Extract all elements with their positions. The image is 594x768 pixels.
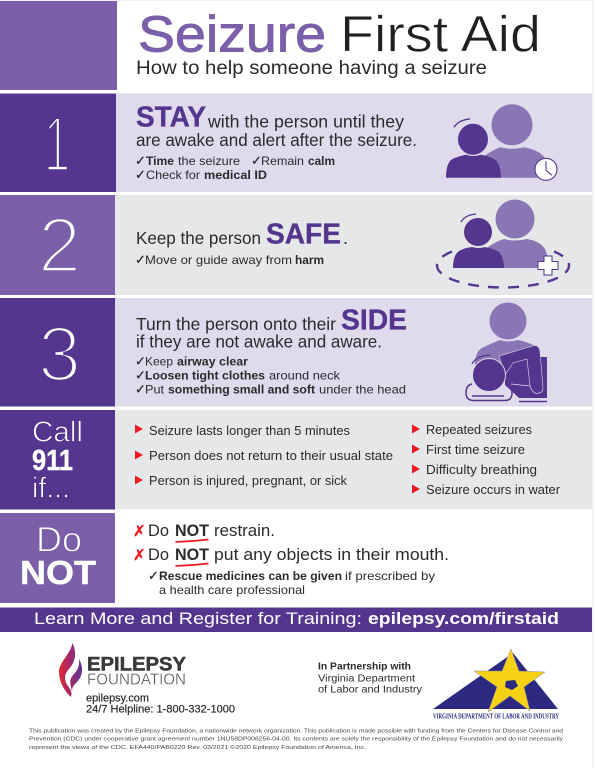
step 3 checklist: Keep — [145, 355, 173, 369]
panel: step 3 side — [0, 298, 592, 406]
step 1 checklist: ✓ — [135, 168, 146, 183]
step 1 heading: are awake and alert after the seizure. — [136, 130, 417, 150]
panel: call 911 — [0, 410, 592, 510]
step 1 checklist: calm — [308, 154, 335, 168]
step 3 heading: if they are not awake and aware. — [136, 332, 382, 352]
step number 3: 3 — [38, 310, 81, 398]
911 reasons left column: Person is injured, pregnant, or sick — [149, 474, 348, 488]
logo: epilepsy foundation: epilepsy.com — [86, 693, 149, 705]
panel: do not — [0, 513, 449, 603]
logo: virginia department of labor and industry — [433, 649, 559, 720]
step 1 checklist: the seizure — [178, 154, 240, 168]
rescue medicines note: if prescribed by — [345, 569, 435, 583]
fine print: Prevention (CDC) under cooperative grant agreement number 1NU58DP006256-04-00. Its contents are solely the responsibility of the Epilepsy Foundation and do not necessarily — [29, 737, 563, 743]
911 reasons right column: Difficulty breathing — [426, 463, 537, 477]
step 2 checklist — [135, 253, 324, 268]
panel: step 1 stay — [0, 94, 592, 192]
step 1 heading: STAY — [136, 102, 206, 134]
step 2 checklist: ✓ — [135, 253, 146, 268]
step 1 checklist — [135, 154, 335, 183]
step 2 heading: Keep the person — [136, 228, 261, 248]
partnership text: of Labor and Industry — [318, 684, 423, 696]
icon: two people in safe circle — [437, 200, 569, 287]
panel: training banner: Learn More and Register for Training: — [34, 609, 362, 628]
do not restrain: Do — [148, 521, 169, 540]
911 reasons left column: Person does not return to their usual state — [149, 449, 393, 463]
911 reasons right column: Seizure occurs in water — [426, 483, 560, 497]
step 1 checklist: ✓ — [135, 154, 146, 169]
step 3 checklist: ✓ — [135, 369, 146, 384]
fine print — [29, 728, 563, 751]
step 3 checklist: under the head — [319, 383, 406, 397]
partnership text: Virginia Department — [318, 673, 415, 685]
step number 2: 2 — [38, 201, 81, 289]
do not restrain: ✗ — [133, 522, 146, 540]
do not label — [20, 521, 96, 591]
step 3 checklist: airway clear — [177, 355, 248, 369]
do not restrain: NOT — [175, 521, 210, 540]
title: Seizure — [138, 6, 326, 63]
red bullet markers — [135, 424, 420, 494]
icon: flame — [59, 643, 82, 697]
911 reasons right column — [426, 423, 560, 497]
step 3 checklist: around neck — [269, 369, 341, 383]
step 3 checklist: ✓ — [135, 355, 146, 370]
step 3 checklist — [135, 355, 406, 398]
step 1 checklist: Time — [146, 154, 174, 168]
do not restrain: restrain. — [214, 521, 275, 540]
do not restrain — [133, 521, 275, 542]
step 3 heading — [136, 304, 407, 352]
call 911 label: 911 — [32, 445, 73, 477]
step 3 checklist: Loosen tight clothes — [145, 369, 265, 383]
step 1 heading: with the person until they — [207, 111, 404, 131]
rescue medicines note: Rescue medicines can be given — [159, 569, 342, 583]
rescue medicines note: a health care professional — [159, 583, 305, 597]
step 1 checklist: Check for — [146, 168, 200, 182]
step 3 heading: SIDE — [341, 304, 407, 336]
logo: epilepsy foundation: 24/7 Helpline: 1-800-332-1000 — [86, 704, 235, 716]
fine print: This publication was created by the Epilepsy Foundation, a nationwide network organization. This publication is made possible with funding from the Centers for Disease Control and — [29, 728, 563, 734]
step 2 heading: . — [343, 228, 348, 248]
do not label: Do — [36, 521, 82, 560]
911 reasons right column: Repeated seizures — [426, 423, 532, 437]
step 2 heading — [136, 218, 348, 250]
step 2 checklist: Move or guide away from — [145, 253, 292, 267]
logo: epilepsy foundation: EPILEPSY — [87, 655, 186, 676]
fine print: represent the views of the CDC. EFA440/PAB0220 Rev. 03/2021 ©2020 Epilepsy Foundation of America, Inc. — [29, 744, 366, 751]
step 3 heading: Turn the person onto their — [136, 314, 336, 334]
icon: person turned on side — [466, 302, 547, 402]
step 1 heading — [136, 102, 417, 150]
rescue medicines note: ✓ — [148, 569, 159, 584]
step 3 checklist: ✓ — [135, 383, 146, 398]
step 3 checklist: Put — [145, 383, 165, 397]
step 2 heading: SAFE — [266, 218, 341, 250]
panel: training banner: epilepsy.com/firstaid — [368, 609, 559, 628]
call 911 label — [32, 417, 83, 505]
do not put objects in mouth: Do — [148, 545, 169, 564]
step 2 checklist: harm — [295, 253, 324, 267]
logo: epilepsy foundation: FOUNDATION — [87, 671, 186, 688]
logo: epilepsy foundation — [59, 643, 235, 716]
partnership text — [318, 661, 423, 696]
step 1 checklist: ✓ — [251, 154, 262, 169]
partnership text: In Partnership with — [318, 661, 411, 672]
call 911 label: if... — [32, 473, 70, 505]
rescue medicines note — [148, 569, 435, 597]
step 3 checklist: something small and soft — [168, 383, 315, 397]
911 reasons left column: Seizure lasts longer than 5 minutes — [149, 424, 350, 438]
subtitle: How to help someone having a seizure — [136, 58, 487, 79]
do not put objects in mouth: NOT — [175, 545, 210, 564]
panel: header — [0, 1, 541, 90]
step number 1: 1 — [44, 100, 70, 188]
panel: training banner — [0, 608, 592, 632]
do not label: NOT — [20, 554, 96, 591]
panel: step 2 safe — [0, 195, 592, 295]
title — [138, 6, 541, 63]
do not put objects in mouth: put any objects in their mouth. — [214, 545, 449, 564]
step 1 checklist: medical ID — [204, 168, 267, 182]
911 reasons left column — [149, 424, 393, 488]
icon: two people with clock — [446, 104, 557, 180]
911 reasons right column: First time seizure — [426, 443, 525, 457]
do not put objects in mouth — [133, 545, 449, 566]
title: First Aid — [340, 6, 541, 63]
header colour block — [0, 1, 117, 90]
step 1 checklist: Remain — [261, 154, 304, 168]
do not put objects in mouth: ✗ — [133, 546, 146, 564]
call 911 label: Call — [32, 417, 83, 449]
